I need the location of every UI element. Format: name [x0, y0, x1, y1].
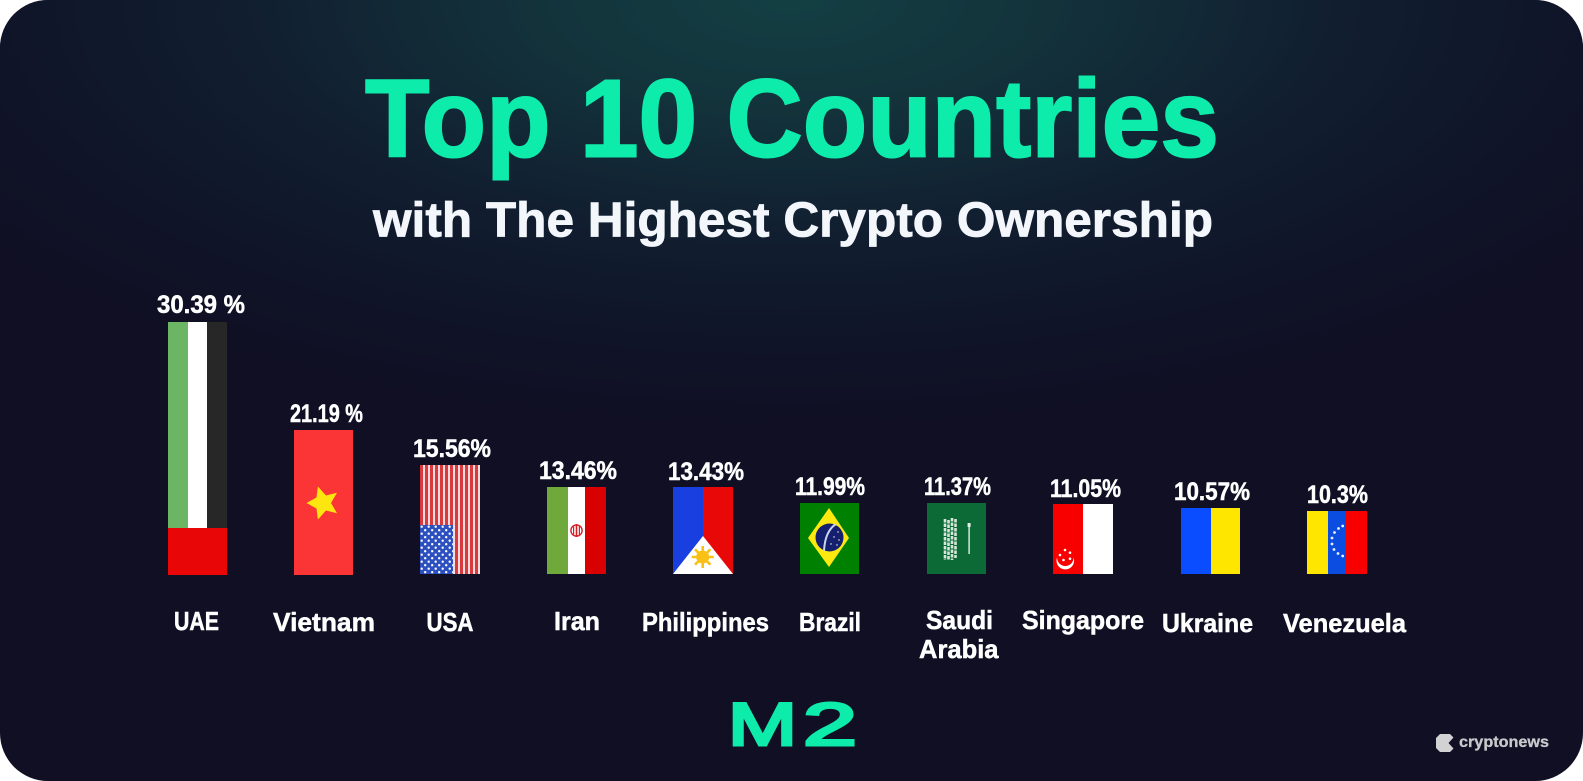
flag bar: Vietnam: [294, 430, 353, 575]
flag bar: Singapore: [1053, 504, 1113, 574]
bar: Ukraine: [1162, 478, 1253, 638]
logo: M2: 2: [803, 691, 857, 758]
bar: Singapore: [1022, 475, 1144, 635]
label: Saudi Arabia: Saudi: [926, 605, 993, 635]
flag bar: Iran: [547, 487, 606, 574]
flag bar: Saudi Arabia: [927, 503, 986, 574]
label: USA: USA: [426, 607, 474, 637]
value: Singapore: 11.05%: [1050, 475, 1121, 503]
label: Brazil: Brazil: [799, 607, 861, 637]
flag bar: Philippines: [673, 487, 733, 574]
value: Iran: 13.46%: [539, 457, 617, 485]
label: Saudi Arabia: [919, 605, 999, 664]
label: Ukraine: Ukraine: [1162, 608, 1253, 638]
title: Top 10 Countries: [365, 58, 1219, 180]
label: UAE: UAE: [174, 606, 219, 636]
logo: M2: [728, 691, 857, 758]
bar: UAE: [157, 291, 245, 636]
label: Iran: Iran: [554, 606, 600, 636]
bar: Philippines: [642, 458, 769, 637]
bar: Venezuela: [1283, 481, 1407, 638]
value: UAE: 30.39 %: [157, 291, 245, 319]
flag bar: Venezuela: [1307, 511, 1367, 574]
value: Brazil: 11.99%: [795, 473, 865, 501]
bar: Vietnam: [273, 400, 375, 637]
logo: M2: M: [728, 691, 797, 758]
bar: Brazil: [795, 473, 865, 637]
label: Vietnam: Vietnam: [273, 607, 375, 637]
value: Saudi Arabia: 11.37%: [924, 473, 991, 501]
value: USA: 15.56%: [413, 435, 491, 463]
value: Venezuela: 10.3%: [1307, 481, 1368, 509]
bar: Saudi Arabia: [919, 473, 999, 664]
flag bar: Brazil: [800, 503, 859, 574]
label: Saudi Arabia: Arabia: [919, 634, 999, 664]
icon: cryptonews mark: [1436, 734, 1454, 752]
brand: cryptonews: cryptonews: [1459, 734, 1549, 751]
flag bar: USA: [420, 465, 480, 574]
value: Vietnam: 21.19 %: [290, 400, 363, 428]
flag bar: Ukraine: [1181, 508, 1240, 574]
subtitle: with The Highest Crypto Ownership: [372, 194, 1213, 248]
value: Ukraine: 10.57%: [1174, 478, 1250, 506]
flag bar: UAE: [168, 322, 227, 575]
label: Philippines: Philippines: [642, 607, 769, 637]
bar: USA: [413, 435, 491, 637]
value: Philippines: 13.43%: [668, 458, 744, 486]
bar: Iran: [539, 457, 617, 636]
label: Singapore: Singapore: [1022, 605, 1144, 635]
label: Venezuela: Venezuela: [1283, 608, 1407, 638]
